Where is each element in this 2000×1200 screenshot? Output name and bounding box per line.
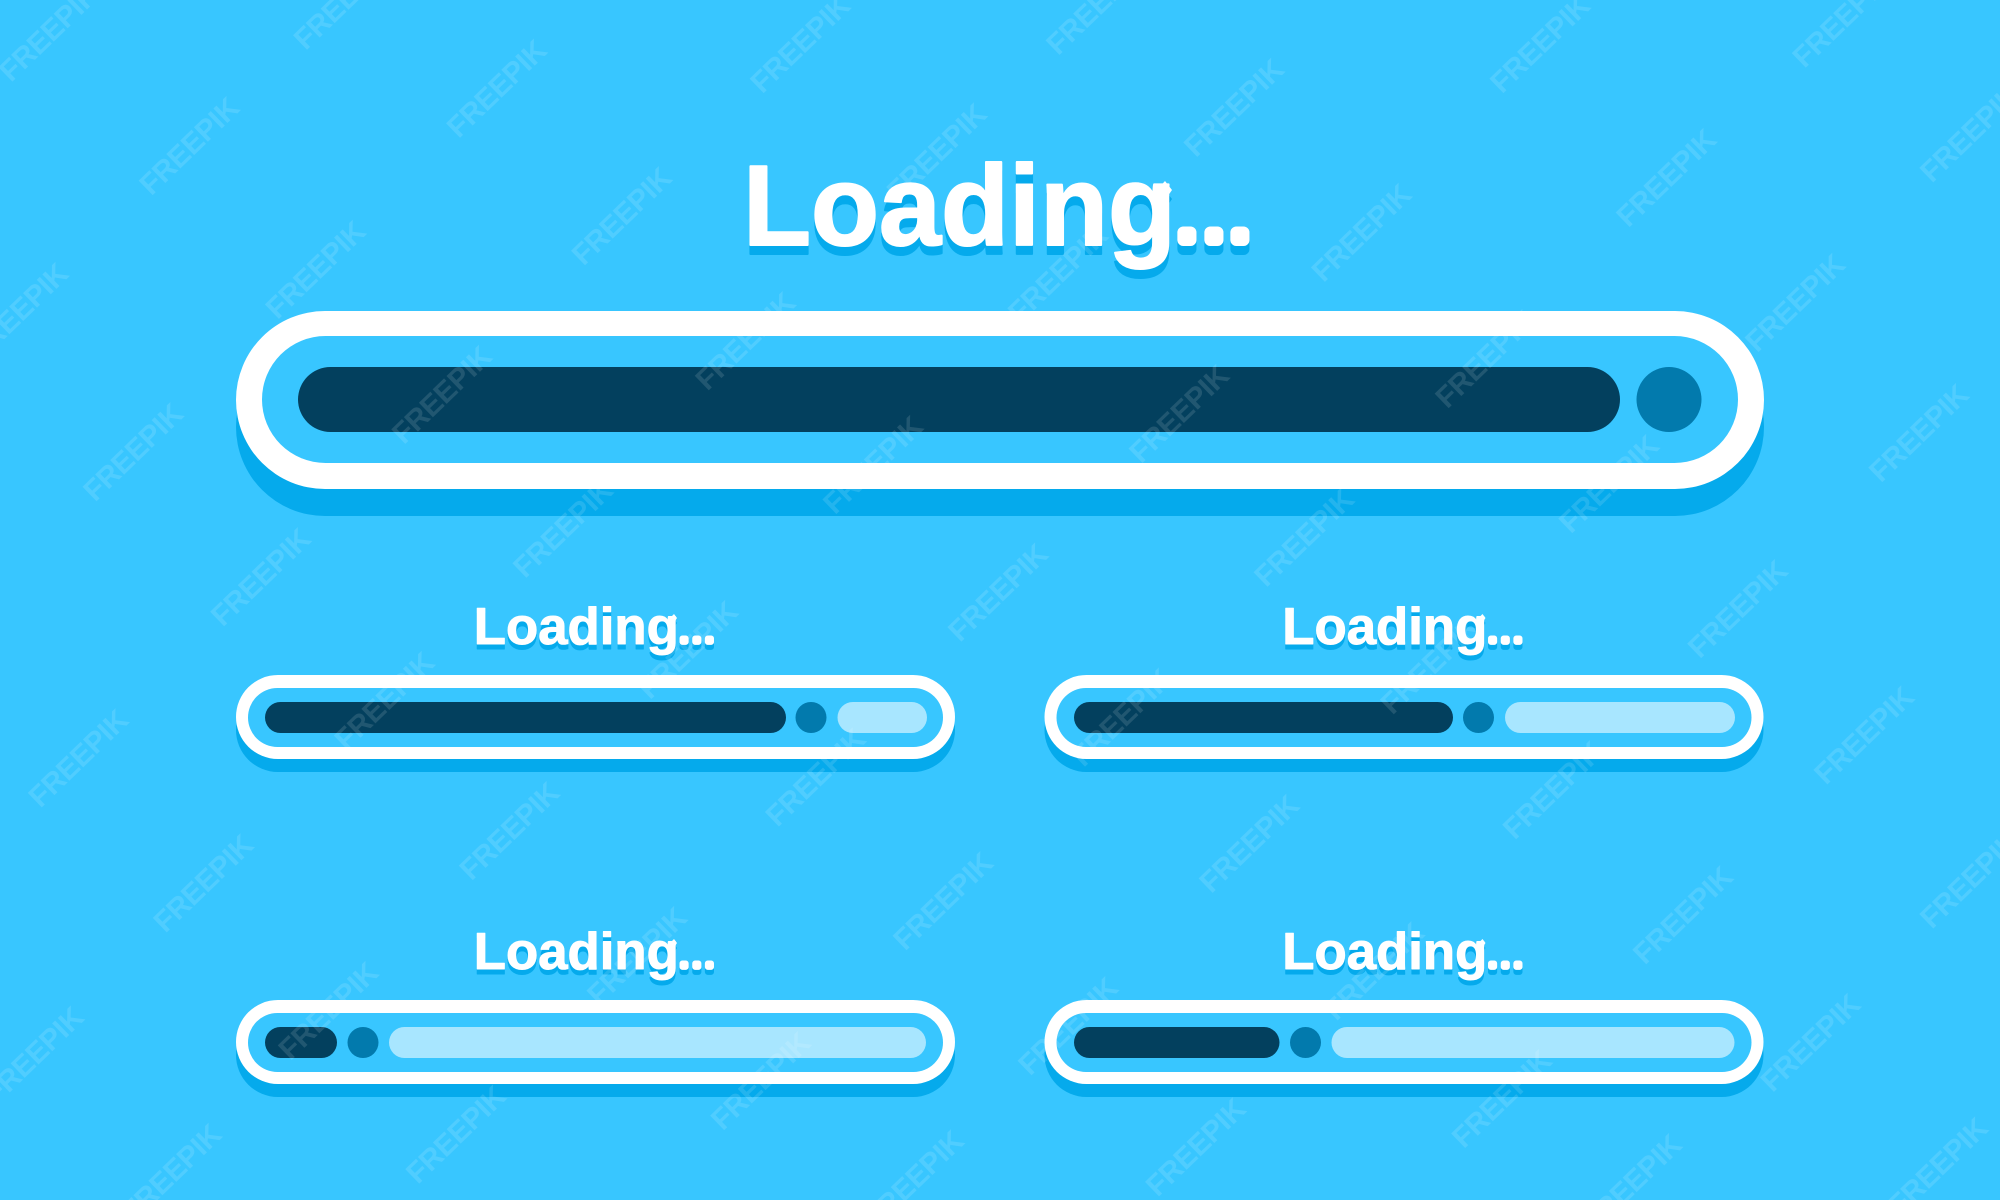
progress fill [298,367,1620,432]
watermarks: FREEPIK [507,474,620,584]
watermarks: FREEPIK [1193,789,1306,899]
progress fill [1074,702,1453,733]
progress fill [1074,1027,1280,1058]
watermarks: FREEPIK [1140,1092,1252,1200]
bar track [262,336,1738,463]
bar shadow [236,1013,955,1097]
watermarks: FREEPIK [22,703,135,814]
watermarks: FREEPIK [1429,304,1542,415]
bar frame [236,311,1764,489]
progress dot [1463,702,1494,733]
bar shadow [236,338,1764,516]
remaining track [838,702,927,733]
progress fill [265,1027,337,1058]
watermarks: FREEPIK [1808,680,1921,791]
heading: loading top right: Loading [1282,598,1487,656]
watermarks: FREEPIK [1012,971,1125,1082]
panel: progress bar bottom left [236,1000,955,1097]
panel: progress bar bottom right [1044,1000,1764,1097]
progress dot [1636,367,1702,432]
bar frame [1044,675,1764,759]
watermarks: FREEPIK [1123,359,1236,469]
remaining track [1332,1027,1734,1058]
watermarks: FREEPIK [581,901,694,1011]
heading: loading bottom left: ... [681,946,713,973]
watermarks: FREEPIK [1610,123,1723,233]
watermarks: FREEPIK [77,397,190,508]
watermarks: FREEPIK [1627,860,1740,971]
watermarks: FREEPIK [817,410,930,520]
heading: loading top left: Loading [474,598,679,656]
watermarks: FREEPIK [566,161,678,272]
progress dot [1290,1027,1321,1058]
watermarks: FREEPIK [1682,554,1795,665]
watermarks: FREEPIK [887,846,1000,957]
panel: main progress bar [236,311,1764,516]
progress dot [348,1027,378,1058]
watermarks: FREEPIK [1248,483,1361,593]
watermarks: FREEPIK [272,956,385,1066]
watermarks: FREEPIK [1863,378,1976,489]
watermarks: FREEPIK [1066,662,1178,773]
panel: progress bar top left [236,675,955,772]
title: Loading [743,143,1176,270]
watermarks: FREEPIK [942,537,1055,648]
bar track [1056,1013,1752,1072]
watermarks: FREEPIK [1497,735,1610,846]
watermarks: FREEPIK [260,215,372,325]
bar track [1056,688,1752,747]
heading: loading top right: ... [1489,621,1521,648]
title: ... [1180,195,1247,251]
heading: loading bottom right: ... [1489,946,1521,973]
watermarks: FREEPIK [689,286,802,397]
watermarks: FREEPIK [1318,916,1431,1027]
watermarks: FREEPIK [133,91,246,202]
bar shadow [236,688,955,772]
watermarks: FREEPIK [386,340,499,450]
watermarks: FREEPIK [1002,219,1115,329]
remaining track [389,1027,926,1058]
watermarks: FREEPIK [453,776,566,886]
watermarks: FREEPIK [1553,429,1666,540]
bar frame [236,1000,955,1084]
watermarks: FREEPIK [705,1026,817,1136]
watermarks: FREEPIK [1754,988,1867,1098]
watermarks: FREEPIK [1446,1044,1559,1154]
watermarks: FREEPIK [632,595,745,705]
watermarks: FREEPIK [147,828,260,939]
bar shadow [1044,688,1764,772]
watermarks: FREEPIK [1178,53,1291,163]
heading: loading bottom left: Loading [474,923,679,981]
watermarks: FREEPIK [881,97,994,208]
bar shadow [1044,1013,1764,1097]
heading: loading top left: ... [681,621,713,648]
watermarks: FREEPIK [1374,610,1487,721]
panel: progress bar top right [1044,675,1764,772]
watermarks: FREEPIK [760,722,872,833]
watermarks: FREEPIK [1305,178,1418,288]
watermarks: FREEPIK [441,34,553,144]
heading: loading bottom right: Loading [1282,923,1487,981]
watermarks: FREEPIK [205,522,318,633]
watermarks: FREEPIK [328,646,441,756]
progress dot [796,702,826,733]
bar frame [236,675,955,759]
bar track [248,1013,943,1072]
remaining track [1505,702,1735,733]
watermarks: FREEPIK [400,1079,513,1190]
progress fill [265,702,786,733]
bar track [248,688,943,747]
watermarks: FREEPIK [1739,248,1852,358]
bar frame [1044,1000,1764,1084]
